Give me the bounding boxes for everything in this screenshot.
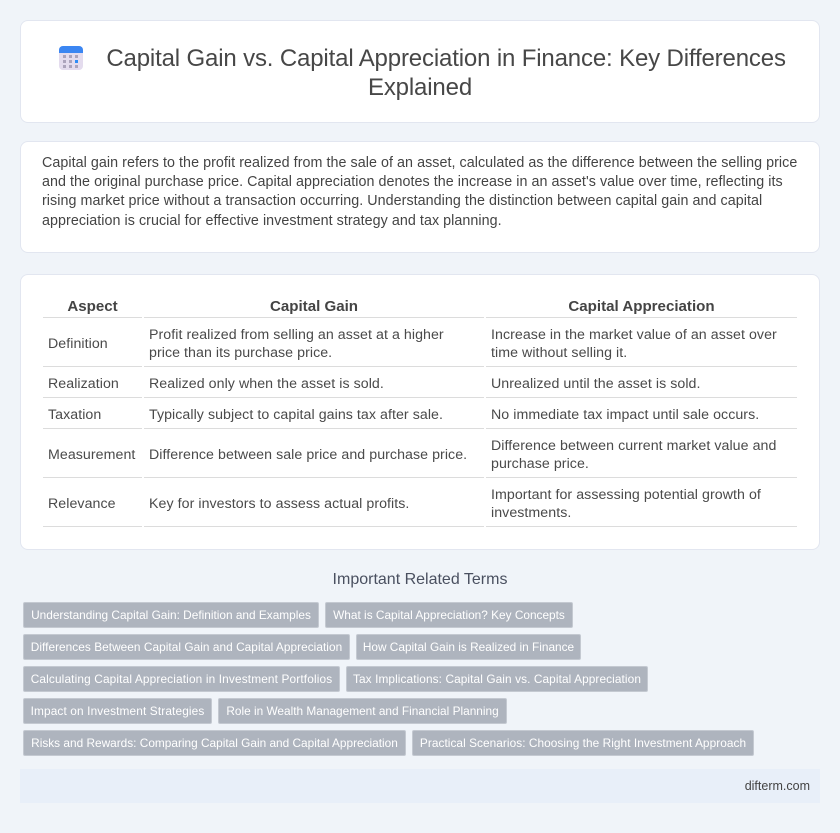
related term chips: Understanding Capital Gain: Definition and Examples [31,608,311,622]
footer [20,769,820,803]
footer brand: difterm.com [745,779,810,793]
related term chips [23,602,754,756]
table header: Capital Appreciation [568,298,715,315]
description text: and the original purchase price. Capital appreciation denotes the increase in an asset's value over time, reflecting its [42,174,783,190]
row: relevance [48,487,761,521]
row: relevance: investments. [491,505,571,521]
panel: comparison table [20,274,820,550]
panel: description [20,141,820,253]
icon: calendar [59,46,83,70]
related term chips: Tax Implications: Capital Gain vs. Capital Appreciation [353,672,641,686]
row: relevance: Key for investors to assess actual profits. [149,496,409,512]
row: realization: Realized only when the asset is sold. [149,376,384,392]
title: Capital Gain vs. Capital Appreciation in Finance: Key Differences [106,45,786,72]
related term chips: Differences Between Capital Gain and Capital Appreciation [31,640,342,654]
description text [42,155,797,229]
related term chips: Risks and Rewards: Comparing Capital Gain and Capital Appreciation [31,736,398,750]
row: realization [48,376,701,392]
row: realization: Unrealized until the asset is sold. [491,376,701,392]
row: taxation [48,407,759,423]
table header: Aspect [67,298,118,315]
title: Explained [368,74,472,101]
related term chips: Role in Wealth Management and Financial Planning [226,704,499,718]
row: definition: price than its purchase price. [149,345,332,361]
related term chips: What is Capital Appreciation? Key Concepts [333,608,565,622]
table header [67,298,715,315]
row: definition: Increase in the market value of an asset over [491,327,777,343]
row: relevance: Important for assessing potential growth of [491,487,761,503]
related terms heading: Important Related Terms [333,571,507,588]
row: definition: Definition [48,336,108,352]
header panel [20,20,820,123]
related term chips: Impact on Investment Strategies [31,704,204,718]
row: definition: Profit realized from selling an asset at a higher [149,327,444,343]
row: measurement: purchase price. [491,456,589,472]
table header: Capital Gain [270,298,358,315]
row: taxation: Taxation [48,407,101,423]
row: measurement: Measurement [48,447,135,463]
related term chips: Practical Scenarios: Choosing the Right Investment Approach [420,736,746,750]
description text: appreciation is crucial for effective investment strategy and tax planning. [42,213,502,229]
description text: Capital gain refers to the profit realized from the sale of an asset, calculated as the difference between the selling price [42,155,797,171]
row: realization: Realization [48,376,119,392]
row: measurement: Difference between sale price and purchase price. [149,447,467,463]
row: measurement: Difference between current market value and [491,438,776,454]
row: definition [48,327,777,361]
row: definition: time without selling it. [491,345,627,361]
row: taxation: No immediate tax impact until sale occurs. [491,407,759,423]
row: taxation: Typically subject to capital gains tax after sale. [149,407,443,423]
row: relevance: Relevance [48,496,116,512]
row: measurement [48,438,776,472]
title [106,45,786,101]
related term chips: Calculating Capital Appreciation in Investment Portfolios [31,672,332,686]
related term chips: How Capital Gain is Realized in Finance [363,640,574,654]
description text: rising market price without a transaction occurring. Understanding the distinction between capital gain and capital [42,193,762,209]
